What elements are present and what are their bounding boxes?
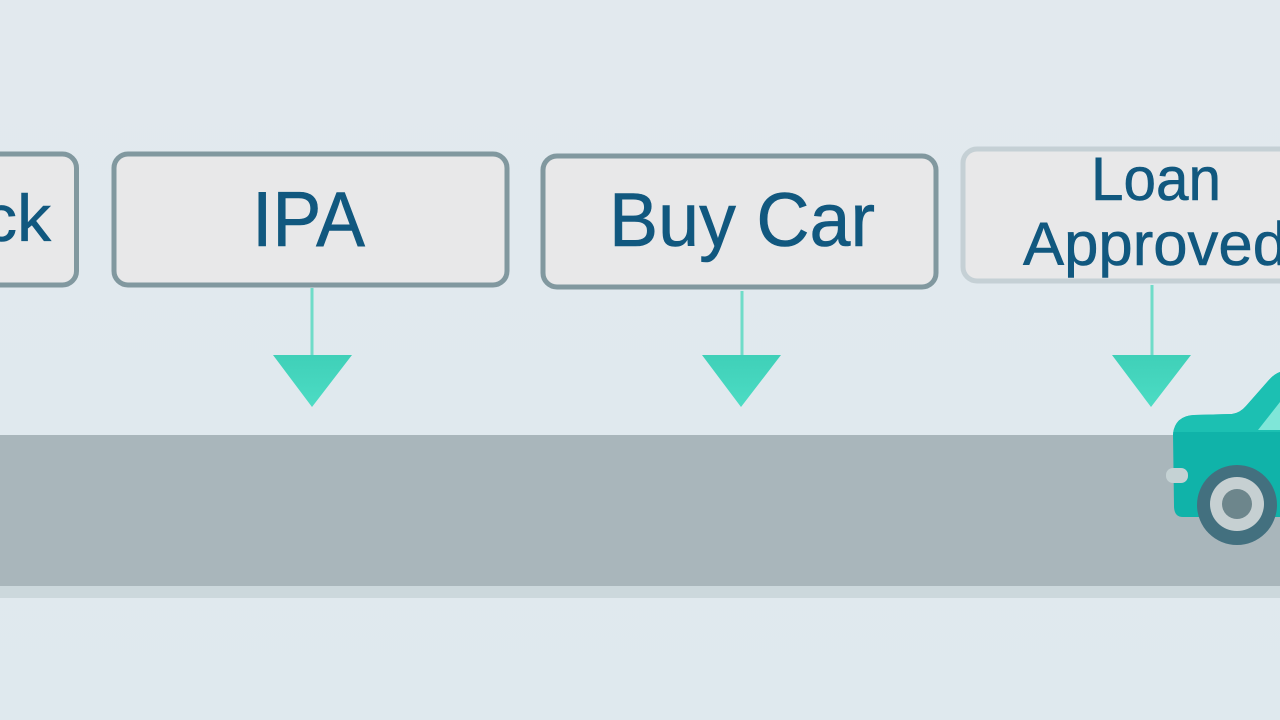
step box: Loan Approved: [963, 145, 1280, 281]
arrow: Loan Approved to road: [1112, 285, 1191, 407]
step box: Buy Car: Buy Car: [609, 178, 875, 263]
arrow: Buy Car to road: [702, 291, 781, 407]
step box: Loan Approved: Loan: [1091, 145, 1221, 213]
step box: Buy Car: [543, 156, 936, 287]
road band: [0, 435, 1280, 598]
icon: car (cropped): [1166, 372, 1280, 545]
step box: Loan Approved: Approved: [1023, 210, 1280, 278]
arrow: IPA to road: [273, 288, 352, 407]
step box: Check (cropped): [0, 154, 76, 285]
step box: IPA: IPA: [252, 175, 365, 263]
step box: IPA: [114, 154, 507, 285]
